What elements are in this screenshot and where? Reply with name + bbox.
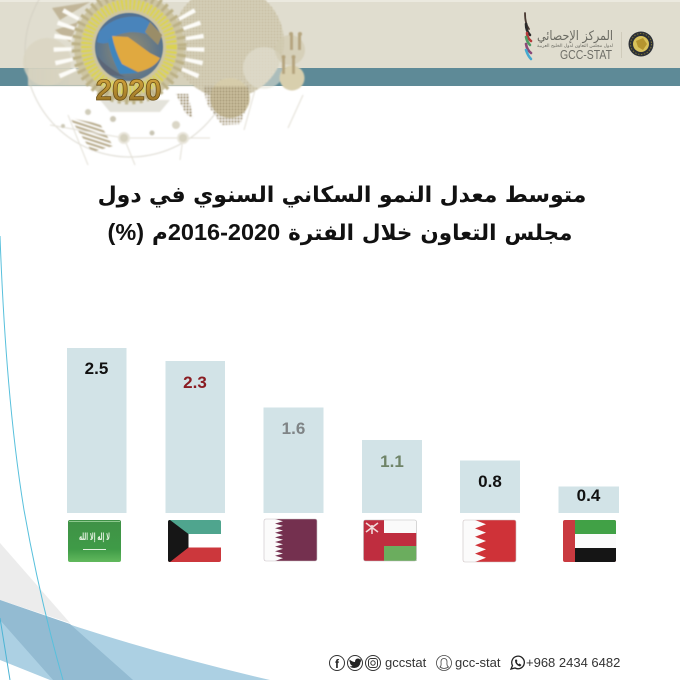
GCC emblem — [628, 32, 654, 56]
GCC-STAT logo — [525, 13, 654, 62]
bar: Oman 1.1 — [362, 440, 422, 513]
bar: Saudi Arabia 2.5 — [67, 348, 126, 513]
bar: UAE 0.4: 0.4 — [577, 486, 601, 505]
handle: gcc-stat: gcc-stat — [455, 655, 501, 670]
icon: instagram — [366, 656, 380, 670]
icon: facebook: f — [335, 657, 340, 671]
2020 text: 2020 — [96, 74, 162, 107]
handle: gccstat: gccstat — [385, 655, 427, 670]
flag: Qatar — [264, 519, 317, 561]
bar: Kuwait 2.3 — [166, 361, 225, 513]
decorative bottom-left shapes — [0, 236, 270, 680]
title line 2: مجلس التعاون خلال الفترة 2020-2016م (%) — [108, 219, 572, 245]
flag: UAE — [563, 520, 616, 562]
icon: twitter — [348, 656, 362, 670]
logo GCC-STAT wordmark: GCC-STAT — [560, 48, 612, 62]
bar: Bahrain 0.8: 0.8 — [478, 472, 502, 491]
header artwork: globe with 2020 — [23, 0, 305, 165]
sun rays around globe — [63, 0, 195, 102]
flag: Oman — [364, 520, 416, 561]
logo ribbon — [525, 13, 531, 59]
phone number: +968 2434 6482 — [526, 655, 620, 670]
bar: Saudi Arabia 2.5: 2.5 — [85, 359, 108, 378]
icon: facebook — [330, 656, 344, 671]
footer social icons and handles — [330, 655, 620, 671]
flag: Bahrain — [463, 520, 516, 562]
bar chart — [67, 348, 619, 513]
icon: whatsapp — [511, 656, 524, 669]
flag: Saudi Arabia: لا إله إلا الله — [79, 532, 110, 543]
flag: Kuwait — [168, 520, 221, 562]
bar: UAE 0.4 — [558, 486, 619, 513]
bar: Qatar 1.6 — [264, 408, 324, 513]
header band — [0, 0, 680, 86]
logo subtitle: لدول مجلس التعاون لدول الخليج العربية — [537, 44, 613, 49]
icon: snapchat — [436, 656, 452, 670]
bar: Kuwait 2.3: 2.3 — [183, 373, 207, 392]
bar: Bahrain 0.8 — [460, 460, 520, 513]
title line 1: متوسط معدل النمو السكاني السنوي في دول — [98, 182, 586, 207]
bar: Qatar 1.6: 1.6 — [282, 419, 305, 438]
logo Arabic name: المركز الإحصائي — [537, 29, 613, 44]
globe — [95, 13, 163, 81]
flag: Saudi Arabia — [68, 520, 121, 562]
bar: Oman 1.1: 1.1 — [380, 452, 404, 471]
